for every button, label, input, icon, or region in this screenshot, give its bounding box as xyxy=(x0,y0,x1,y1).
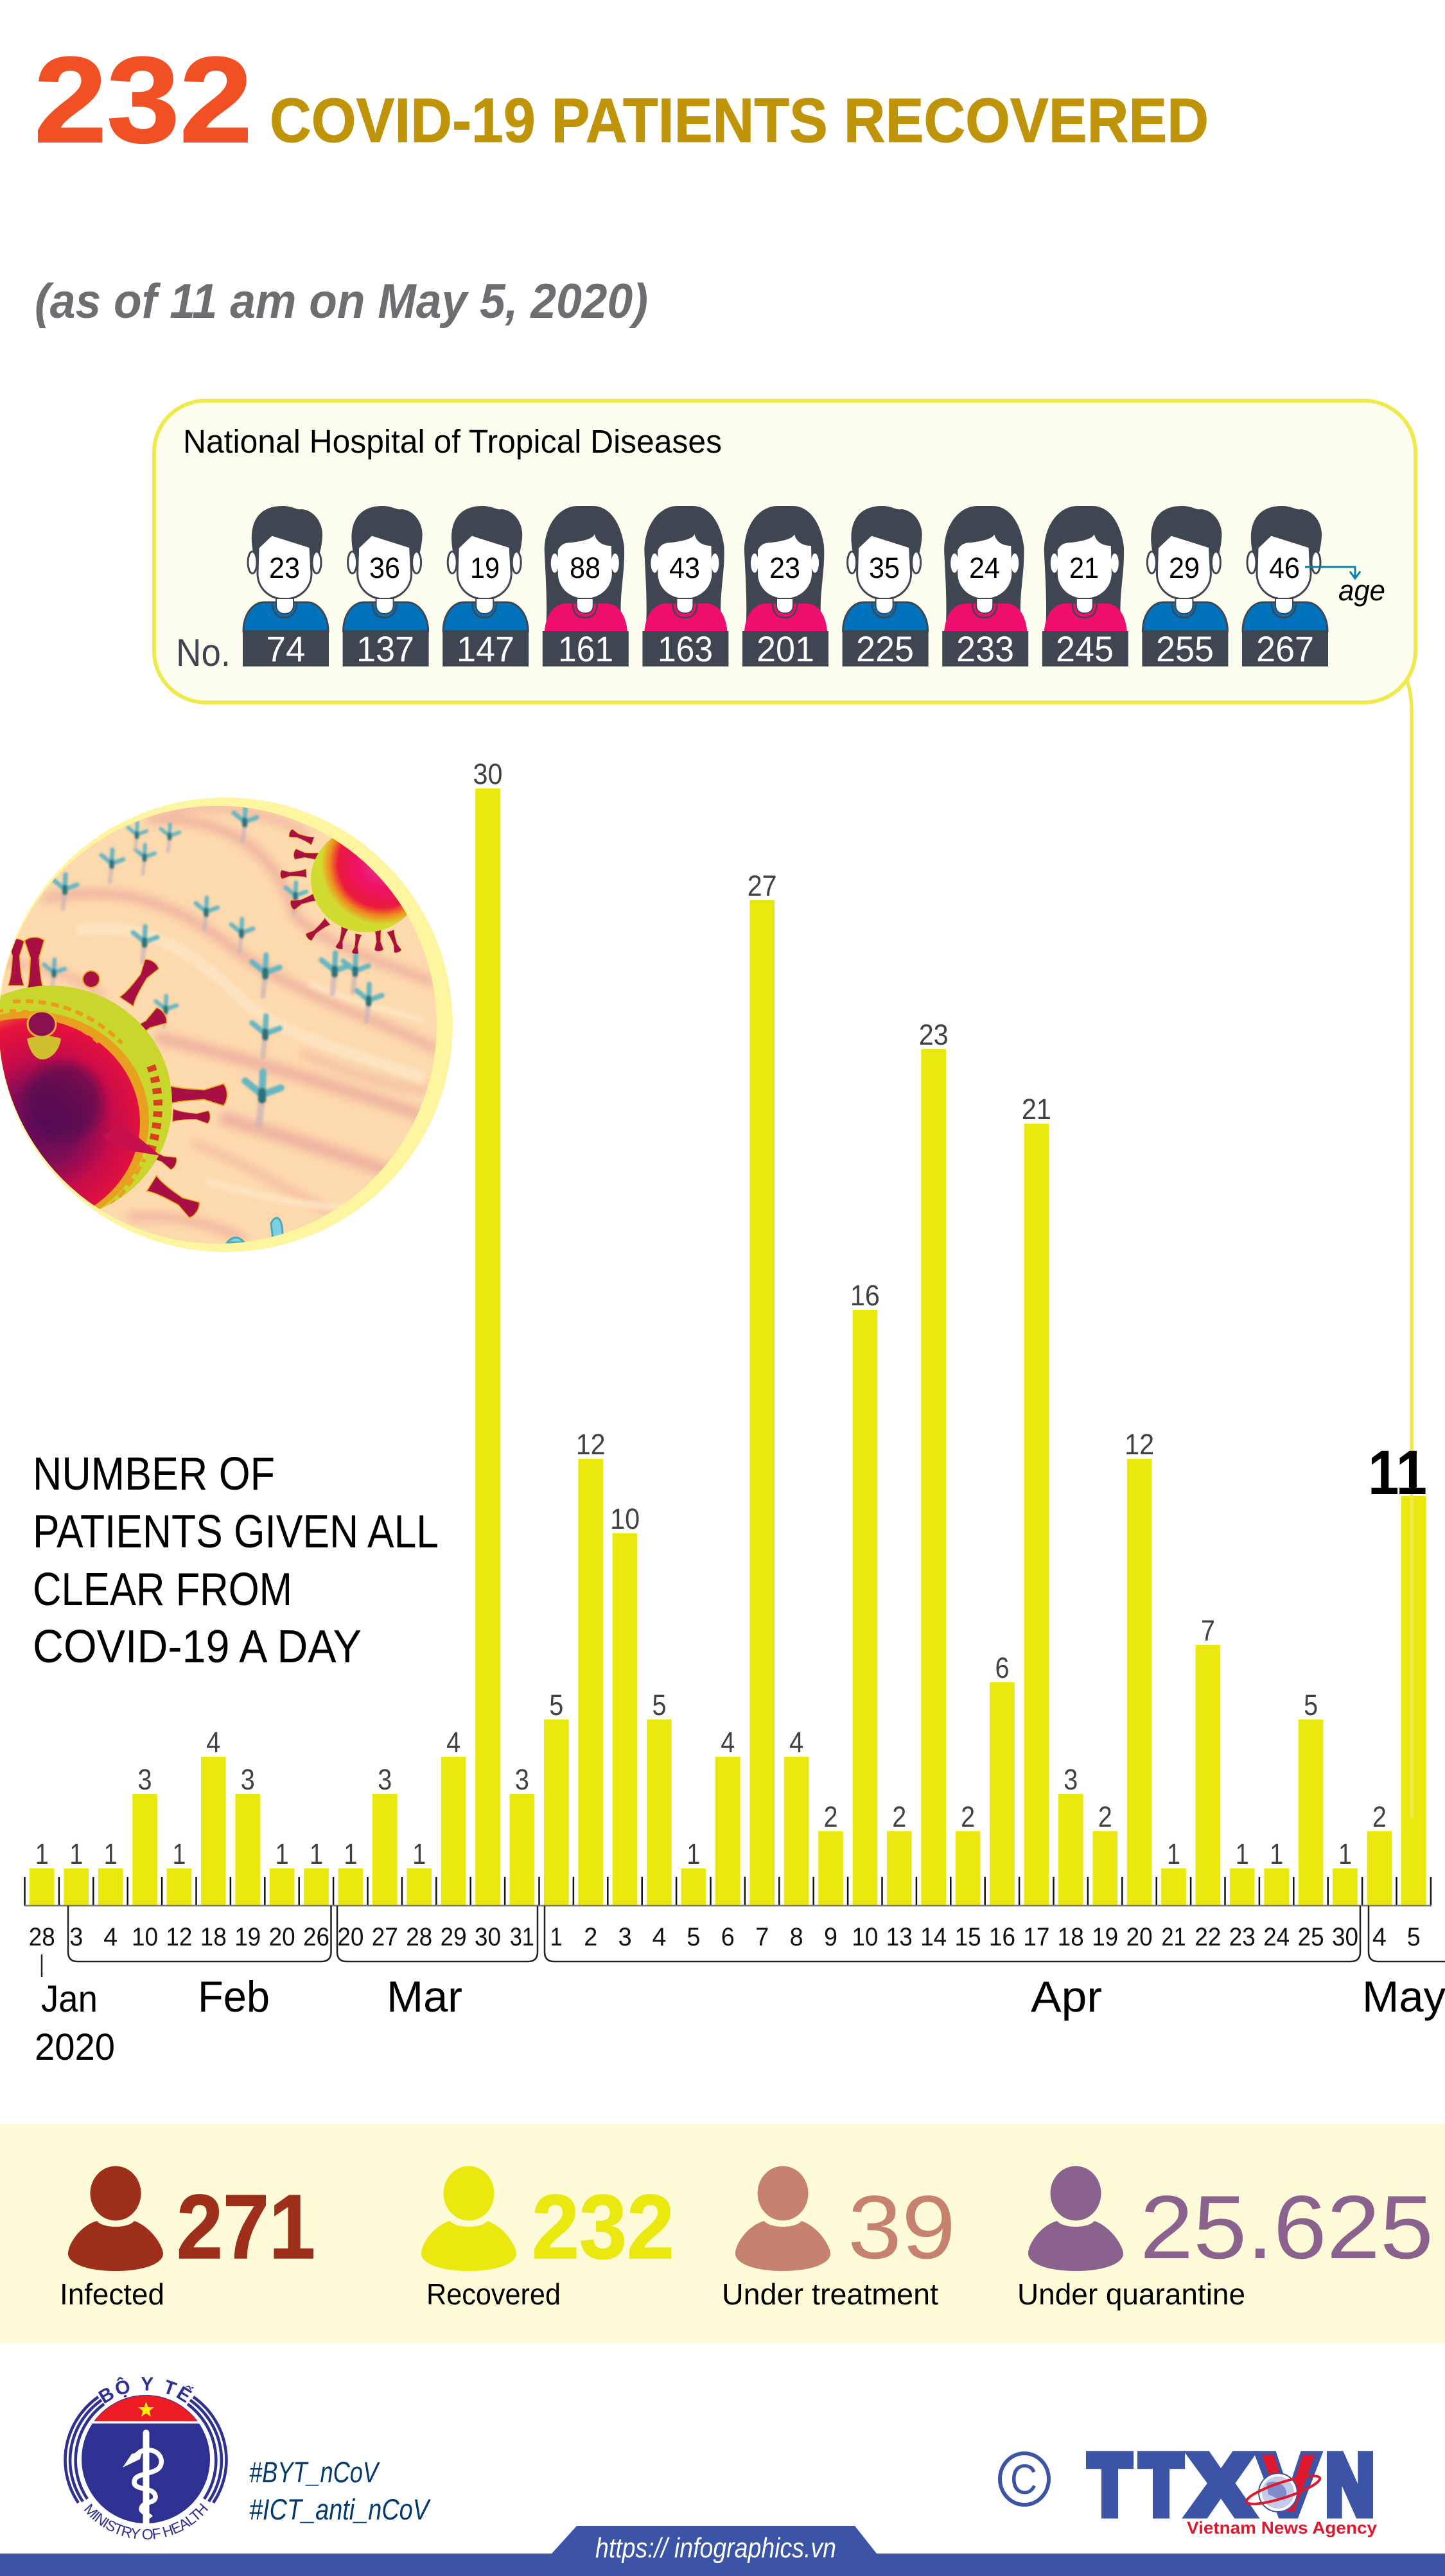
value labels: 1 xyxy=(344,1838,357,1870)
logo: Ministry of Health: BỘ Y TẾ xyxy=(98,2377,194,2404)
value labels: 6 xyxy=(995,1651,1010,1684)
date labels: 4 xyxy=(652,1923,667,1951)
month labels: Feb xyxy=(198,1972,270,2021)
title: COVID-19 PATIENTS RECOVERED xyxy=(270,85,1209,155)
patient 267: 46 xyxy=(1269,552,1300,584)
stat: infected: 271 xyxy=(177,2176,315,2278)
date labels: 5 xyxy=(687,1923,700,1951)
chart heading: NUMBER OF xyxy=(33,1449,275,1500)
date labels: 4 xyxy=(1372,1923,1387,1951)
date labels: 12 xyxy=(166,1923,192,1951)
date labels: 31 xyxy=(510,1923,534,1951)
stat: under quarantine: 25.625 xyxy=(1140,2177,1433,2277)
footer bar with website tab xyxy=(0,2526,1445,2576)
date labels: 5 xyxy=(1407,1923,1421,1951)
patient 201: 23 xyxy=(769,552,800,584)
value labels: 1 xyxy=(310,1838,323,1870)
date labels: 22 xyxy=(1195,1923,1221,1951)
patient 163: 163 xyxy=(658,629,713,669)
patient 225: 225 xyxy=(856,629,914,669)
logo: TTXVN Vietnam News Agency: V xyxy=(1261,2438,1315,2530)
date labels: 10 xyxy=(852,1923,878,1951)
stat: recovered: Recovered xyxy=(426,2277,561,2311)
panel heading: National Hospital of Tropical Diseases xyxy=(183,423,722,460)
logo: TTXVN Vietnam News Agency: X xyxy=(1189,2437,1252,2533)
patient 161: 88 xyxy=(570,552,600,584)
logo: Ministry of Health: MINISTRY OF HEALTH xyxy=(83,2503,208,2540)
patient 161: 161 xyxy=(558,629,613,669)
date labels: 3 xyxy=(618,1923,632,1951)
logo: TTXVN Vietnam News Agency: T xyxy=(1089,2437,1131,2533)
stat: under quarantine xyxy=(1017,2166,1433,2311)
patient 245 xyxy=(1042,506,1128,669)
patient 225 xyxy=(843,506,929,669)
copyright mark xyxy=(1000,2453,1049,2505)
antibodies xyxy=(44,807,382,1125)
patient 74 xyxy=(243,506,329,669)
date labels: 10 xyxy=(132,1923,158,1951)
date labels: 8 xyxy=(790,1923,803,1951)
patient 255: 29 xyxy=(1169,552,1200,584)
date labels: 20 xyxy=(337,1923,363,1951)
value labels: 21 xyxy=(1022,1093,1051,1126)
patient 74: 74 xyxy=(266,629,306,669)
hashtags xyxy=(249,2456,431,2526)
connector line from panel to May 5 bar xyxy=(1406,679,1412,1818)
value labels: 1 xyxy=(1338,1838,1352,1870)
stat: infected: Infected xyxy=(60,2277,164,2311)
patient 163 xyxy=(642,506,728,669)
date labels: 18 xyxy=(1058,1923,1084,1951)
patient 201 xyxy=(742,506,828,669)
logo: TTXVN Vietnam News Agency: T xyxy=(1140,2437,1182,2533)
axis baseline xyxy=(24,1905,1432,1906)
value labels: 2 xyxy=(1372,1800,1387,1833)
date labels: 19 xyxy=(234,1923,261,1951)
date labels: 28 xyxy=(406,1923,432,1951)
panel: national statistics xyxy=(0,2124,1445,2344)
patient 137 xyxy=(343,506,429,669)
logo: TTXVN Vietnam News Agency xyxy=(1089,2437,1377,2537)
value labels: 1 xyxy=(69,1838,83,1870)
patient 137: 36 xyxy=(369,552,400,584)
value labels: 1 xyxy=(1167,1838,1180,1870)
chart heading: PATIENTS GIVEN ALL xyxy=(33,1506,439,1558)
hashtags: #BYT_nCoV xyxy=(249,2456,380,2489)
month brackets xyxy=(42,1906,1445,1977)
date labels: 20 xyxy=(1126,1923,1153,1951)
value labels xyxy=(35,758,1427,1870)
value labels: 12 xyxy=(1125,1428,1154,1461)
date labels: 20 xyxy=(269,1923,295,1951)
No. label: No. xyxy=(176,631,231,674)
date labels: 9 xyxy=(824,1923,837,1951)
date labels xyxy=(29,1923,1421,1951)
stat: under treatment: 39 xyxy=(848,2177,956,2277)
patient 245: 21 xyxy=(1069,552,1099,584)
chart heading: COVID-19 A DAY xyxy=(33,1621,362,1673)
subtitle: (as of 11 am on May 5, 2020) xyxy=(35,274,648,329)
patient 147 xyxy=(442,506,529,669)
chart heading xyxy=(33,1449,439,1673)
stat: infected xyxy=(60,2166,315,2311)
logo: TTXVN Vietnam News Agency: Vietnam News Agency xyxy=(1187,2518,1377,2537)
globe xyxy=(1244,2471,1322,2512)
date labels: 14 xyxy=(920,1923,947,1951)
value labels: 1 xyxy=(1236,1838,1249,1870)
value labels: 2 xyxy=(823,1800,837,1833)
value labels: 23 xyxy=(919,1018,949,1051)
patient 233 xyxy=(942,506,1028,669)
date labels: 3 xyxy=(69,1923,83,1951)
date labels: 23 xyxy=(1229,1923,1256,1951)
date labels: 18 xyxy=(200,1923,227,1951)
patient 255: 255 xyxy=(1156,629,1214,669)
value labels: 11 xyxy=(1368,1438,1427,1508)
stat: under treatment: Under treatment xyxy=(722,2277,938,2311)
date labels: 6 xyxy=(721,1923,735,1951)
arrow: age pointer xyxy=(1305,567,1360,579)
value labels: 4 xyxy=(446,1726,460,1759)
patient 137: 137 xyxy=(356,629,414,669)
month labels: 2020 xyxy=(35,2026,115,2068)
value labels: 12 xyxy=(576,1428,606,1461)
value labels: 3 xyxy=(137,1763,152,1796)
date labels: 29 xyxy=(441,1923,467,1951)
date labels: 19 xyxy=(1092,1923,1118,1951)
value labels: 10 xyxy=(610,1502,640,1535)
date labels: 1 xyxy=(550,1923,563,1951)
patient 267: 267 xyxy=(1256,629,1314,669)
patient 74: 23 xyxy=(269,552,300,584)
value labels: 1 xyxy=(412,1838,426,1870)
bars xyxy=(30,788,1426,1906)
patient 147: 147 xyxy=(457,629,514,669)
website url: https:// infographics.vn xyxy=(595,2532,836,2564)
patient 201: 201 xyxy=(757,629,814,669)
patient 255 xyxy=(1142,506,1228,669)
stat: recovered xyxy=(421,2166,674,2311)
date labels: 17 xyxy=(1023,1923,1049,1951)
date labels: 24 xyxy=(1263,1923,1290,1951)
patient 163: 43 xyxy=(669,552,700,584)
date labels: 15 xyxy=(955,1923,981,1951)
virus illustration xyxy=(0,797,453,1252)
date labels: 13 xyxy=(886,1923,913,1951)
date labels: 21 xyxy=(1161,1923,1186,1951)
patient 225: 35 xyxy=(869,552,900,584)
patient 267 xyxy=(1242,506,1328,669)
patient 233: 24 xyxy=(969,552,1000,584)
date labels: 27 xyxy=(372,1923,398,1951)
month labels xyxy=(35,1972,1445,2068)
value labels: 3 xyxy=(515,1763,529,1796)
value labels: 30 xyxy=(473,758,502,790)
value labels: 1 xyxy=(35,1838,49,1870)
month labels: Apr xyxy=(1031,1972,1102,2021)
value labels: 7 xyxy=(1201,1614,1215,1647)
bar chart: patients given all clear per day xyxy=(24,679,1445,2068)
value labels: 1 xyxy=(276,1838,289,1870)
logo: Ministry of Health xyxy=(64,2377,228,2540)
patient 233: 233 xyxy=(956,629,1014,669)
value labels: 2 xyxy=(961,1800,975,1833)
stat: recovered: 232 xyxy=(532,2176,674,2278)
value labels: 1 xyxy=(104,1838,118,1870)
value labels: 2 xyxy=(1098,1800,1112,1833)
value labels: 5 xyxy=(1304,1689,1318,1721)
age label: age xyxy=(1338,574,1385,607)
lower antibody fragments xyxy=(271,1218,283,1239)
axis ticks xyxy=(24,1877,1431,1906)
date labels: 4 xyxy=(103,1923,118,1951)
copyright mark: C xyxy=(1010,2455,1037,2503)
patient 161 xyxy=(543,506,629,669)
date labels: 7 xyxy=(755,1923,769,1951)
chart heading: CLEAR FROM xyxy=(33,1564,292,1615)
date labels: 2 xyxy=(584,1923,597,1951)
date labels: 25 xyxy=(1298,1923,1324,1951)
logo: TTXVN Vietnam News Agency: V xyxy=(1259,2437,1318,2533)
value labels: 4 xyxy=(789,1726,803,1759)
date labels: 26 xyxy=(303,1923,329,1951)
month labels: Jan xyxy=(41,1978,98,2020)
month labels: Mar xyxy=(387,1972,462,2021)
stat: under quarantine: Under quarantine xyxy=(1017,2277,1245,2311)
value labels: 16 xyxy=(850,1279,880,1312)
month labels: May xyxy=(1362,1972,1445,2021)
value labels: 4 xyxy=(721,1726,735,1759)
stat: under treatment xyxy=(722,2166,956,2311)
large virus xyxy=(0,937,227,1230)
value labels: 3 xyxy=(1064,1763,1078,1796)
value labels: 1 xyxy=(1270,1838,1283,1870)
date labels: 16 xyxy=(989,1923,1015,1951)
value labels: 3 xyxy=(378,1763,392,1796)
value labels: 5 xyxy=(549,1689,563,1721)
value labels: 4 xyxy=(206,1726,220,1759)
date labels: 28 xyxy=(29,1923,55,1951)
value labels: 1 xyxy=(172,1838,186,1870)
date labels: 30 xyxy=(1332,1923,1358,1951)
small virus xyxy=(280,828,407,954)
big number 232: 232 xyxy=(34,32,252,168)
patient 245: 245 xyxy=(1056,629,1114,669)
value labels: 3 xyxy=(241,1763,255,1796)
value labels: 1 xyxy=(687,1838,700,1870)
value labels: 2 xyxy=(892,1800,906,1833)
hashtags: #ICT_anti_nCoV xyxy=(249,2493,431,2526)
panel: National Hospital of Tropical Diseases xyxy=(154,401,1415,702)
logo: TTXVN Vietnam News Agency: N xyxy=(1326,2437,1374,2533)
value labels: 27 xyxy=(748,869,777,902)
patient 147: 19 xyxy=(470,552,500,584)
date labels: 30 xyxy=(475,1923,501,1951)
value labels: 5 xyxy=(652,1689,667,1721)
